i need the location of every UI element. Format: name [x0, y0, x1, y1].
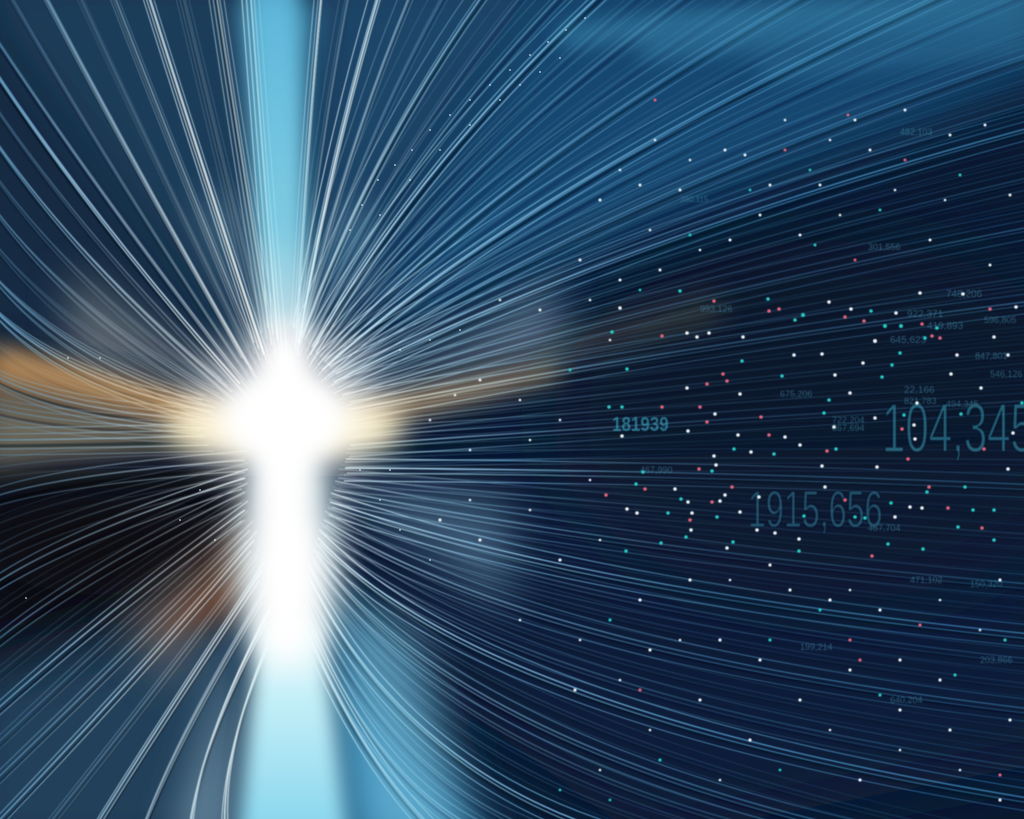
- faint data numbers: 467,990: [640, 465, 673, 475]
- faint data numbers: 419,893: [927, 321, 964, 332]
- scattered white data points: [429, 108, 1018, 802]
- faint data numbers: 993,126: [700, 304, 733, 314]
- faint data numbers: 471,102: [910, 575, 943, 585]
- dark vignette over the far right data field: [550, 240, 1024, 600]
- faint data numbers: 380,115: [680, 195, 709, 204]
- central white burst: [190, 325, 380, 675]
- faint data numbers: 748,206: [946, 289, 983, 300]
- large number 1915,656: 1915,656: [748, 481, 882, 539]
- faint data numbers: 675,206: [780, 389, 813, 399]
- faint data numbers: 494,345: [946, 399, 979, 409]
- faint data numbers: 482,103: [900, 127, 933, 137]
- left lower fibre bundle: [0, 445, 277, 819]
- cyan streaks at the top right: [560, 0, 1024, 70]
- faint data numbers: 150,320: [970, 579, 1003, 589]
- cyan light column above burst: [246, 0, 310, 340]
- dark vignette over lower left: [0, 495, 240, 595]
- faint data numbers: 199,214: [800, 642, 833, 652]
- faint data numbers: 722,204: [832, 415, 865, 425]
- faint data numbers: 867,694: [832, 423, 865, 433]
- faint data numbers: 546,126: [990, 369, 1023, 379]
- faint data numbers: 645,623: [890, 335, 927, 346]
- faint data numbers: 847,801: [975, 351, 1008, 361]
- faint data numbers: 640,204: [890, 695, 923, 705]
- faint data numbers: 467,704: [868, 523, 901, 533]
- faint data numbers: 821,783: [904, 396, 937, 406]
- faint data numbers: 22,166: [904, 385, 935, 396]
- right lower fibre bundle: [301, 449, 1024, 819]
- scattered teal data points: [559, 169, 1024, 801]
- teal number 181939: 181939: [612, 413, 669, 435]
- upper particle cloud along the bright fibres: [25, 17, 586, 599]
- faint data numbers: 203,866: [980, 655, 1013, 665]
- pale glow on fibres near the burst: [70, 200, 560, 819]
- faint data numbers: 596,805: [984, 315, 1017, 325]
- scattered pink data points: [604, 98, 1002, 777]
- cyan light column below burst: [236, 620, 350, 819]
- left upper fibre bundle: [0, 0, 287, 455]
- faint data numbers: 922,371: [907, 309, 944, 320]
- faint data numbers: 301,556: [868, 242, 901, 252]
- right upper fibre bundle: [291, 0, 1024, 467]
- warm horizontal flare: [0, 350, 560, 458]
- faint data numbers: [612, 127, 1024, 705]
